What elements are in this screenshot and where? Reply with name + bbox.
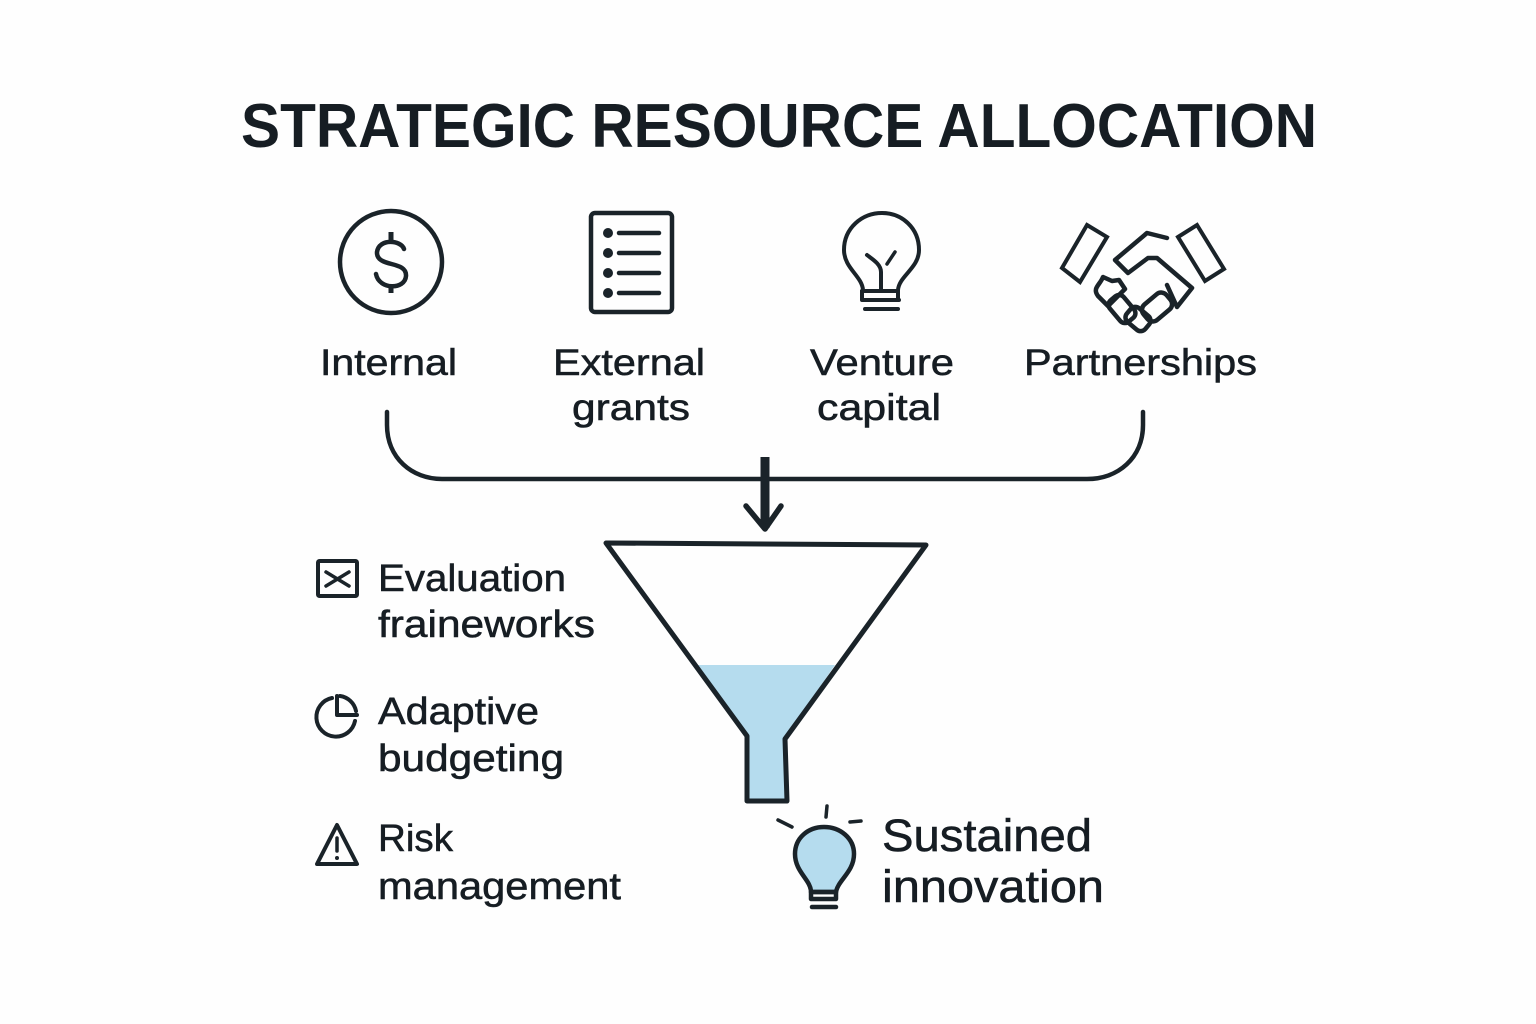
label: adaptive budgeting: Adaptive (378, 691, 539, 733)
funnel outline (606, 543, 926, 801)
label: evaluation frameworks (378, 558, 595, 646)
label: evaluation frameworks: Evaluation (378, 558, 566, 600)
label: sustained innovation: Sustained (882, 810, 1092, 861)
icon: crossed box (318, 561, 357, 596)
outcome: sustained innovation (778, 806, 1104, 912)
column: partnerships (1024, 225, 1257, 383)
icon: document list (591, 213, 672, 312)
label: risk management (378, 818, 621, 908)
label: venture capital: Venture (810, 342, 954, 383)
label: risk management: Risk (378, 818, 454, 860)
funnel fill (698, 665, 835, 801)
icon: handshake (1062, 225, 1224, 334)
icon: pie chart (316, 696, 357, 737)
label: venture capital (810, 342, 954, 428)
label: sustained innovation: innovation (882, 861, 1104, 912)
label: risk management: management (378, 866, 621, 908)
column: internal funding (320, 211, 457, 383)
label: venture capital: capital (817, 387, 941, 428)
label: external grants: External (553, 342, 705, 383)
item: evaluation frameworks (318, 558, 595, 646)
arrow: into funnel (746, 457, 781, 529)
funnel (606, 543, 926, 801)
label: adaptive budgeting: budgeting (378, 738, 564, 780)
label: external grants (553, 342, 705, 428)
icon: glowing blue bulb (778, 806, 861, 907)
icon: dollar coin (340, 211, 442, 313)
label: evaluation frameworks: fraineworks (378, 604, 595, 646)
label: sustained innovation (882, 810, 1104, 912)
label: external grants: grants (572, 387, 690, 428)
item: adaptive budgeting (316, 691, 564, 780)
icon: light bulb (844, 213, 919, 309)
item: risk management (317, 818, 621, 908)
label: adaptive budgeting (378, 691, 564, 780)
label: internal: Internal (320, 342, 457, 383)
bracket connector (387, 412, 1143, 479)
title: STRATEGIC RESOURCE ALLOCATION (241, 92, 1317, 161)
label: partnerships: Partnerships (1024, 342, 1257, 383)
column: venture capital (810, 213, 954, 428)
icon: warning triangle (317, 825, 357, 864)
column: external grants (553, 213, 705, 428)
